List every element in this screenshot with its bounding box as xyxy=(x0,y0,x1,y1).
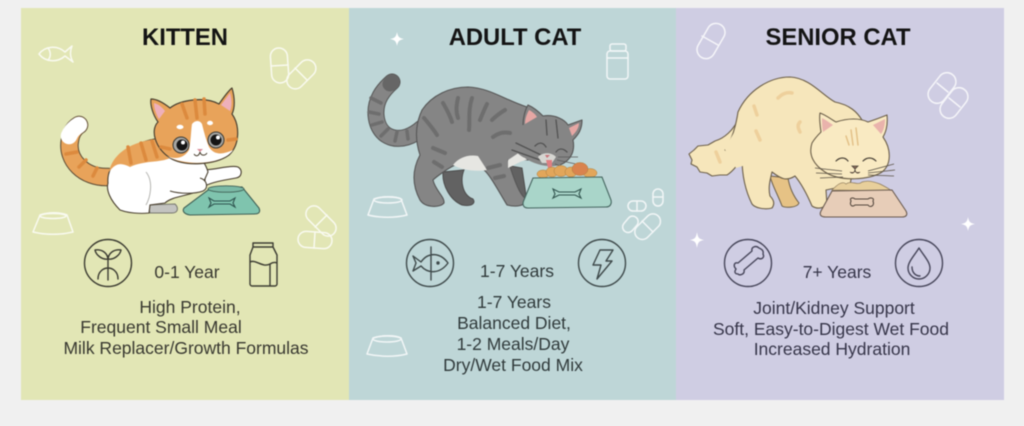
senior cat tail join xyxy=(724,118,746,168)
kitten tail xyxy=(66,125,108,177)
heading: senior cat: SENIOR CAT xyxy=(766,24,911,51)
text: kitten feeding notes: Frequent Small Meal xyxy=(80,317,242,337)
senior cat face xyxy=(846,128,858,145)
senior cat markings xyxy=(716,93,800,162)
kitten face white xyxy=(166,121,233,163)
senior cat far leg xyxy=(770,176,799,207)
kitten bowl xyxy=(183,186,260,215)
senior cat food xyxy=(832,181,892,191)
senior cat head xyxy=(811,113,889,179)
kitten ears xyxy=(154,93,232,119)
row: kitten age and icons xyxy=(84,240,277,286)
senior cat body xyxy=(725,77,862,209)
text: senior feeding notes: Joint/Kidney Support xyxy=(753,298,915,318)
kitten stripes xyxy=(161,99,236,149)
senior cat tail xyxy=(689,120,748,176)
adult cat food xyxy=(537,162,597,178)
illustration: kitten with bowl xyxy=(66,88,260,215)
adult cat head outline xyxy=(523,105,582,165)
panel: adult cat xyxy=(349,8,676,400)
senior cat bowl xyxy=(820,190,907,217)
icon: fish outline xyxy=(39,46,73,62)
panel: kitten xyxy=(21,8,349,400)
adult cat body xyxy=(414,87,540,206)
text: adult feeding notes: Dry/Wet Food Mix xyxy=(443,355,583,375)
panel: senior cat xyxy=(676,8,1004,400)
heading: kitten: KITTEN xyxy=(142,24,228,51)
kitten nose and mouth xyxy=(197,149,203,152)
kitten near paw xyxy=(165,178,207,193)
text: kitten feeding notes: Milk Replacer/Growth Formulas xyxy=(63,338,309,358)
illustration: senior cat eating xyxy=(689,77,907,217)
icon: milk carton xyxy=(250,243,277,286)
icon: bowl outline left xyxy=(33,213,73,234)
text: adult feeding notes xyxy=(443,292,583,375)
text: kitten feeding notes: High Protein, xyxy=(139,297,241,317)
icon: sprout in circle xyxy=(84,240,132,286)
icon: lightning in circle xyxy=(578,240,626,286)
illustration: adult cat eating xyxy=(369,82,611,208)
text: senior feeding notes: Soft, Easy-to-Digest Wet Food xyxy=(713,319,949,339)
icon: capsules right xyxy=(924,69,972,122)
icon: capsules cluster xyxy=(620,189,664,243)
text: adult feeding notes: 1-2 Meals/Day xyxy=(457,334,570,354)
row: senior age and icons xyxy=(724,240,942,286)
kitten back paw xyxy=(148,204,177,213)
age: 0-1 year: 0-1 Year xyxy=(154,262,220,282)
adult cat stripes xyxy=(424,98,510,178)
age: 7+ years: 7+ Years xyxy=(803,262,872,282)
icon: fish in circle xyxy=(406,240,454,286)
adult cat belly xyxy=(453,152,527,171)
age: 1-7 years: 1-7 Years xyxy=(480,261,554,281)
kitten back patch xyxy=(109,139,170,172)
heading: adult cat: ADULT CAT xyxy=(449,24,582,51)
text: senior feeding notes xyxy=(713,298,949,359)
adult cat ears xyxy=(525,110,579,136)
text: adult feeding notes: 1-7 Years xyxy=(477,292,551,312)
icon: sparkle left xyxy=(690,232,704,248)
adult cat head xyxy=(511,105,582,166)
adult cat far legs xyxy=(443,165,527,206)
text: adult feeding notes: Balanced Diet, xyxy=(457,313,571,333)
text: kitten feeding notes xyxy=(63,297,309,358)
icon: sparkle xyxy=(390,32,404,46)
icon: bottle outline xyxy=(607,44,628,79)
icon: water drop in circle xyxy=(896,240,942,286)
icon: bowl outline lower xyxy=(367,336,407,356)
row: adult age and icons xyxy=(406,240,626,286)
kitten body xyxy=(108,138,208,213)
kitten eyes xyxy=(173,132,224,153)
adult cat face xyxy=(512,120,567,160)
icon: capsules top xyxy=(270,47,319,92)
icon: capsules bottom xyxy=(297,203,339,249)
adult cat tail xyxy=(369,82,422,141)
icon: capsule top xyxy=(694,20,728,62)
icon: bone in circle xyxy=(724,240,772,286)
text: senior feeding notes: Increased Hydration xyxy=(754,339,910,359)
icon: bowl outline upper xyxy=(368,197,407,217)
icon: sparkle right xyxy=(961,217,975,231)
kitten head xyxy=(151,88,238,164)
senior cat ears xyxy=(822,118,885,134)
adult cat bowl xyxy=(523,177,611,208)
kitten far paw xyxy=(205,166,241,186)
